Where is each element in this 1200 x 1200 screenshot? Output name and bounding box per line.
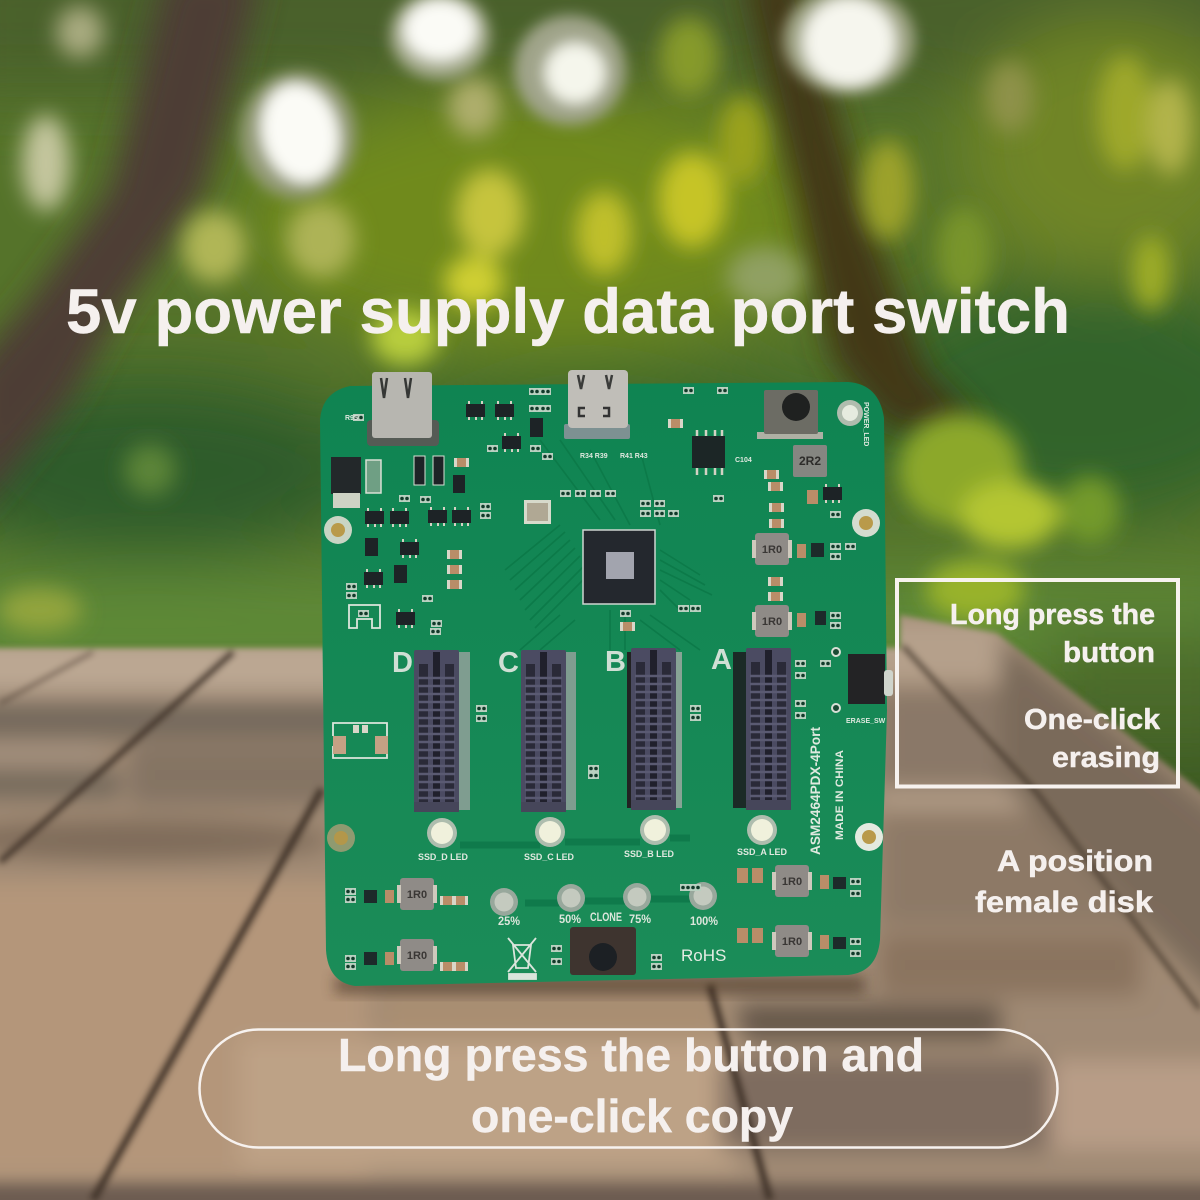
surface-mount parts: right regulators: 1R0 (762, 544, 782, 556)
lower regulators (345, 660, 861, 971)
clone progress captions: CLONE (590, 910, 622, 924)
SOIC chip (692, 430, 725, 475)
callout: one-click erase box: Long press the (950, 599, 1155, 631)
inductor 2R2 (793, 445, 827, 477)
M.2 slot B (627, 648, 682, 810)
inductor 2R2: 2R2 (799, 454, 821, 468)
clone progress captions: 100% (690, 914, 718, 928)
board shadow (335, 976, 865, 994)
clone progress captions (498, 910, 718, 928)
background: blurred foliage (0, 0, 1200, 750)
copper tracks (460, 440, 712, 903)
silkscreen labels: C104 (735, 457, 752, 464)
icon: crossed-out bin (508, 938, 536, 979)
silkscreen labels (345, 402, 886, 855)
SSD LED captions (418, 847, 787, 863)
silkscreen labels: POWER_LED (862, 402, 869, 446)
slot letters: A (711, 644, 732, 676)
lower regulators: 1R0 (407, 950, 427, 962)
circuit board (320, 370, 893, 994)
silkscreen labels: ERASE_SW (846, 718, 886, 725)
SSD LED captions: SSD_D LED (418, 852, 468, 863)
silkscreen labels: MADE IN CHINA (834, 750, 846, 840)
clone progress captions: 50% (559, 912, 581, 926)
slot letters: C (498, 647, 519, 679)
callout: one-click erase box: One-click (1024, 704, 1161, 736)
PCB base (320, 382, 887, 986)
label: A position female disk: A position (997, 845, 1153, 878)
callout: one-click copy pill (200, 1029, 1058, 1148)
clone progress captions: 25% (498, 914, 520, 928)
surface-mount parts: right regulators: 1R0 (762, 616, 782, 628)
lower regulators: 1R0 (782, 936, 802, 948)
wooden table (0, 610, 1200, 1200)
lower regulators: 1R0 (782, 876, 802, 888)
main controller chip (583, 530, 655, 604)
soft coloured bokeh (0, 6, 1192, 632)
SSD LED captions: SSD_C LED (524, 852, 574, 863)
RoHS mark: RoHS (681, 946, 726, 965)
SSD LED captions: SSD_A LED (737, 847, 787, 858)
clone progress captions: 75% (629, 912, 651, 926)
USB-C port: centre (564, 370, 630, 439)
callout: one-click copy pill: one-click copy (471, 1090, 793, 1142)
slot letters: D (392, 647, 413, 679)
silkscreen labels: R41 R43 (620, 453, 648, 460)
label: A position female disk (975, 845, 1153, 919)
callout: one-click erase box (897, 580, 1178, 786)
mounting holes (324, 509, 883, 852)
white bokeh (240, 0, 915, 199)
slot letters (392, 644, 732, 679)
clone progress LEDs (490, 882, 717, 916)
callout: one-click copy pill: Long press the button and (338, 1029, 924, 1081)
surface-mount parts: power section (331, 387, 728, 758)
SSD status LEDs (427, 815, 777, 848)
silkscreen labels: ASM2464PDX-4Port (807, 727, 823, 855)
clone button (570, 927, 636, 975)
callout: one-click erase box: button (1063, 637, 1155, 669)
M.2 slot D (414, 650, 470, 812)
power LED (837, 400, 863, 426)
tree trunks (0, 0, 985, 520)
crystal (524, 500, 551, 524)
callout: one-click erase box: erasing (1052, 742, 1160, 774)
lower regulators: 1R0 (407, 889, 427, 901)
M.2 slot C (521, 650, 576, 812)
USB-C port: left (367, 372, 439, 446)
label: A position female disk: female disk (975, 886, 1153, 919)
M.2 slot A (733, 648, 791, 810)
silkscreen labels: R34 R39 (580, 453, 608, 460)
erase switch (832, 648, 893, 712)
power button (757, 390, 823, 439)
slot letters: B (605, 646, 626, 678)
surface-mount parts: right regulators (620, 470, 856, 637)
title: 5v power supply data port switch (66, 277, 1070, 347)
silkscreen labels: R95 (345, 415, 358, 422)
SSD LED captions: SSD_B LED (624, 849, 674, 860)
